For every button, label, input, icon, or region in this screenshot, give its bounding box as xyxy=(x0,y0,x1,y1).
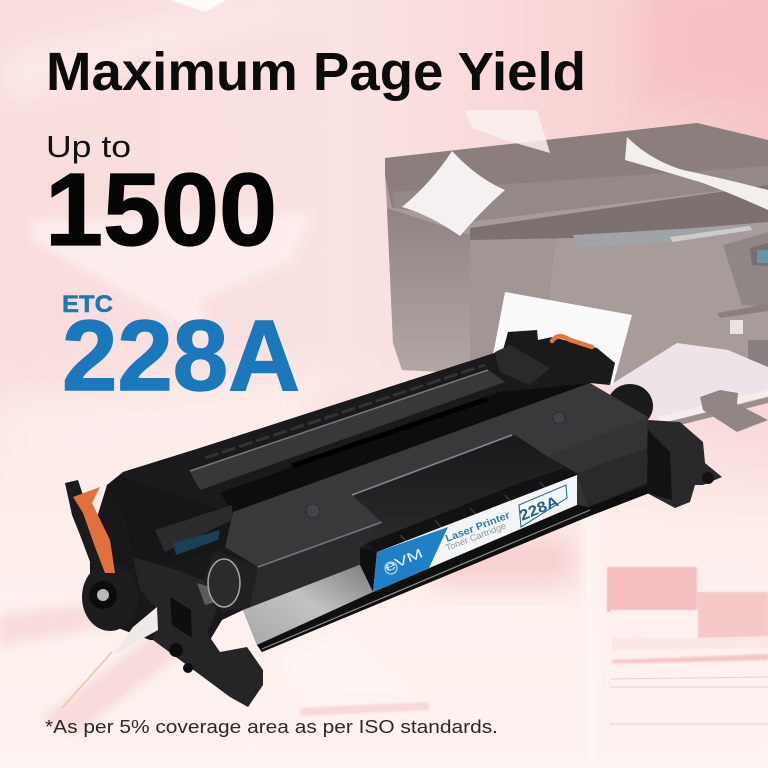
paper output tray xyxy=(610,343,768,417)
label subtitle: Toner Cartridge xyxy=(444,521,507,553)
left end plate xyxy=(133,557,263,707)
label title: Laser Printer xyxy=(444,510,512,545)
model number xyxy=(62,291,300,412)
brand xyxy=(382,545,425,575)
printer body xyxy=(387,208,470,373)
brand: eVM xyxy=(382,545,425,575)
label blue band xyxy=(373,527,448,592)
flying paper: right xyxy=(625,137,768,210)
roller xyxy=(208,559,240,607)
roller end xyxy=(607,384,653,428)
handle trough xyxy=(352,435,577,552)
left tip xyxy=(65,480,118,575)
scanner bar xyxy=(573,225,753,248)
printer silhouette xyxy=(385,123,768,385)
body top face xyxy=(225,383,648,567)
flying paper: top xyxy=(465,110,550,153)
cartridge rear rail xyxy=(120,330,615,512)
rail dark slot xyxy=(220,383,590,512)
flying paper: left xyxy=(402,151,505,236)
rail light band xyxy=(190,370,505,490)
title: Maximum Page Yield xyxy=(46,42,586,102)
right front face xyxy=(548,417,648,507)
model code: 228A xyxy=(62,300,300,412)
cartridge label xyxy=(360,475,577,592)
toner cartridge xyxy=(62,330,722,708)
orange clip rear xyxy=(552,336,592,347)
printer lid xyxy=(385,123,768,208)
paper stack xyxy=(606,567,768,726)
model prefix: ETC xyxy=(62,291,113,318)
printer xyxy=(385,110,768,432)
footnote: *As per 5% coverage area as per ISO standards. xyxy=(45,717,498,737)
control panel xyxy=(723,232,768,307)
up to label: Up to xyxy=(46,129,131,164)
rail ribs xyxy=(205,365,485,458)
paper slip xyxy=(113,607,158,655)
roller housing xyxy=(203,550,258,612)
left gear block xyxy=(107,477,232,565)
paper guide xyxy=(700,390,768,432)
label model badge xyxy=(517,485,567,527)
yield number: 1500 xyxy=(45,152,277,267)
right end cap xyxy=(647,420,722,508)
paper behind cartridge xyxy=(492,292,632,385)
lower rail xyxy=(257,477,673,652)
gear xyxy=(82,563,138,631)
orange clip front xyxy=(73,487,115,573)
clip top ridges xyxy=(495,345,550,385)
cartridge silhouette xyxy=(90,360,648,652)
silver strip xyxy=(243,560,375,645)
label ribs xyxy=(367,468,577,552)
label model badge: 228A xyxy=(517,493,561,525)
body front edge xyxy=(240,522,382,610)
